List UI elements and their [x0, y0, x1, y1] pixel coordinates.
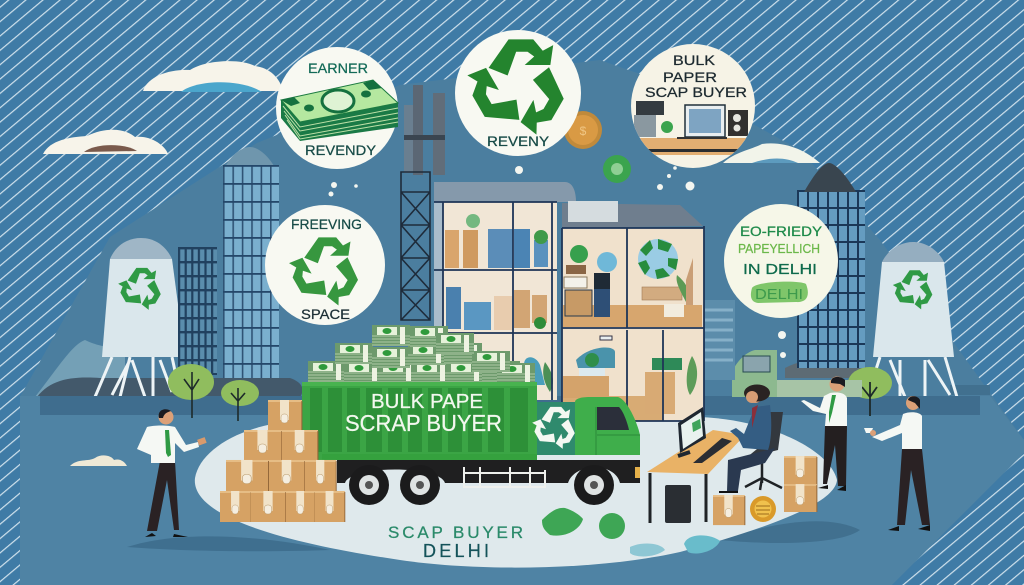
icon: desk with computer: [630, 101, 756, 155]
bubble: eco-friendly paper in delhi: [724, 204, 838, 318]
small cloud mound: [70, 455, 127, 466]
text: scap buyer: SCAP BUYER: [645, 84, 747, 100]
floating coin: $: [580, 124, 587, 138]
text: revendy: REVENDY: [305, 142, 377, 158]
text: scrap buyer delhi: DELHI: [423, 541, 489, 561]
text: papeyellich: PAPEYELLICH: [738, 241, 820, 256]
left skyscrapers: [178, 147, 279, 378]
person: standing man: [801, 376, 847, 491]
connector dots: [328, 166, 786, 358]
right cooling tower: [870, 242, 957, 397]
icon: recycle: [285, 237, 365, 308]
floor ellipse: [195, 417, 837, 568]
chair: [745, 412, 783, 490]
truck cab: [575, 397, 640, 478]
wheels: [349, 465, 614, 505]
trees: [168, 364, 892, 421]
bubble: recycle revenue: [455, 30, 581, 156]
icon: green recycled pile: [542, 508, 583, 536]
text: freeving: FREEVING: [291, 216, 362, 232]
text: paper: PAPER: [663, 69, 717, 85]
recycle panel on truck: [530, 402, 579, 455]
person: right man with paper: [864, 396, 930, 531]
monitor: [678, 407, 732, 463]
bubble: bulk paper scrap buyer: [630, 44, 756, 168]
text: eco-friedy: EO-FRIEDY: [740, 223, 823, 239]
gold coin: [750, 496, 776, 522]
building right block: [562, 201, 735, 421]
seated worker: [719, 384, 775, 493]
truck container: [302, 382, 537, 460]
floating green token: [603, 155, 631, 183]
chimneys: [401, 85, 445, 320]
hills: [35, 340, 990, 397]
money pile on truck: [308, 325, 535, 384]
bubble: freeing space: [265, 205, 385, 325]
left cooling tower: [95, 238, 185, 397]
floating coin: [564, 111, 602, 149]
text: scrap buyer delhi: SCAP BUYER: [388, 523, 523, 542]
stacked cardboard boxes: [220, 400, 345, 522]
right skyscraper: [797, 163, 865, 368]
truck text: BULK PAPE: [371, 390, 483, 413]
side guard: [464, 467, 545, 487]
desk: [647, 430, 745, 523]
clouds: [43, 61, 820, 163]
text: in delhi: IN DELHI: [743, 261, 817, 278]
bottom right corner stripes: [892, 453, 1024, 585]
truck text: SCRAP BUYER: [345, 410, 502, 436]
icon: recycle: [462, 39, 574, 137]
bubble: earner revenue: [276, 47, 398, 169]
text: reveny: REVENY: [487, 133, 550, 149]
truck chassis: [337, 460, 640, 483]
badge: delhi: DELHI: [755, 286, 803, 303]
computer tower: [665, 485, 691, 523]
desk side boxes: [713, 456, 817, 525]
icon: banknote stack: [281, 80, 398, 141]
background truck: [732, 350, 862, 397]
desk workstation: [647, 384, 817, 525]
ground: [20, 396, 1024, 585]
text: space: SPACE: [301, 306, 350, 322]
icon: green token: [599, 513, 625, 539]
text: scrap buyer delhi: [388, 523, 523, 561]
truck text: [345, 390, 502, 436]
text: bulk: BULK: [673, 52, 716, 68]
building left block: [434, 182, 576, 400]
garbage truck: [302, 382, 640, 505]
person: left man: [137, 409, 207, 537]
text: earner: EARNER: [308, 60, 368, 76]
teal blobs: [630, 535, 720, 556]
